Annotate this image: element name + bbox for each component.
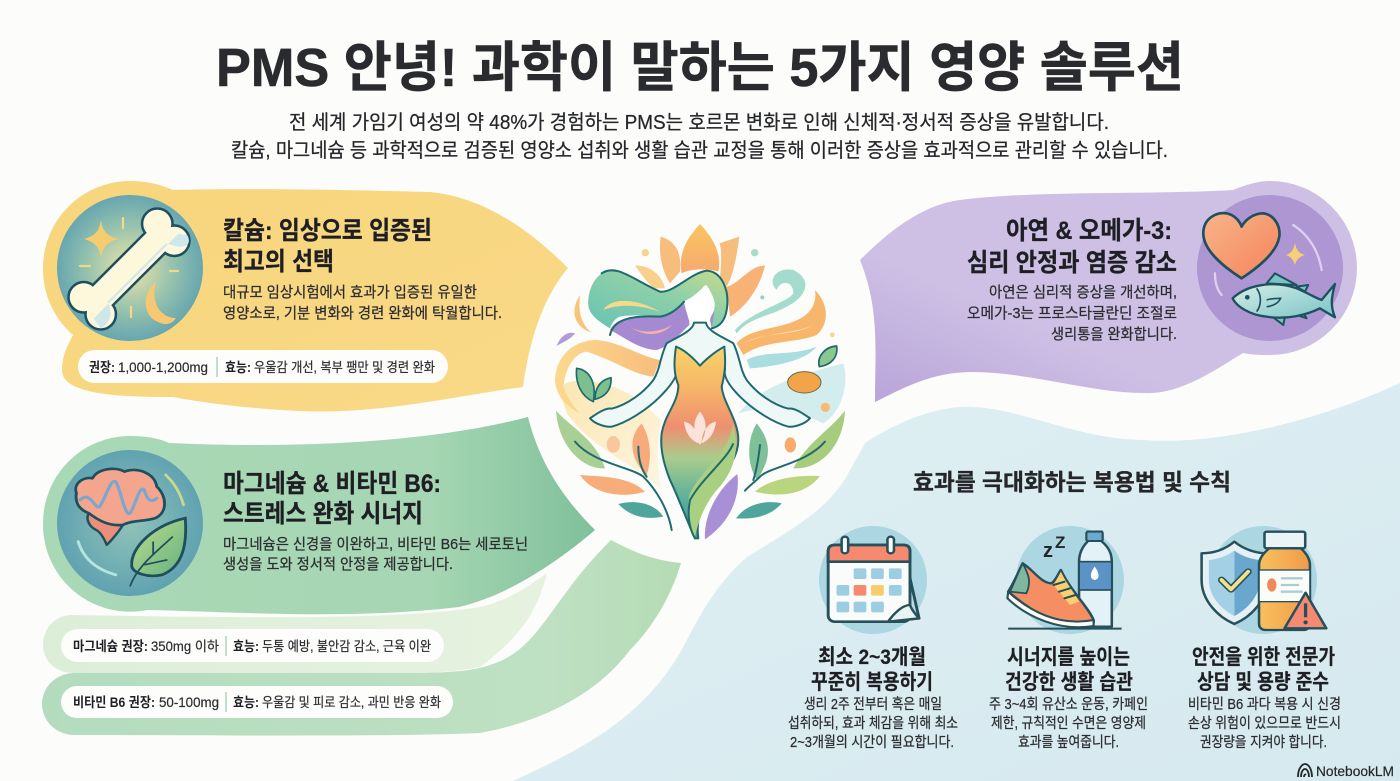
magnesium dosage pill: 마그네슘 권장: (73, 639, 148, 654)
tip text (788, 695, 958, 751)
magnesium dosage pill (61, 629, 444, 662)
botanical leaves (556, 411, 845, 539)
panel: dosing tips background (513, 383, 1400, 781)
heading (223, 470, 441, 528)
tip heading: 건강한 생활 습관 (1005, 671, 1133, 694)
flowing waves (555, 269, 826, 413)
icon: shield, supplement bottle and warning sign (1202, 526, 1326, 634)
tip heading (811, 646, 933, 694)
figure (588, 270, 810, 538)
panel: zinc and omega-3 (860, 181, 1357, 402)
dosage pill: 효능: (225, 360, 251, 375)
vitamin B6 dosage pill (61, 686, 453, 718)
vitamin B6 dosage pill: 비타민 B6 권장: (73, 695, 155, 710)
tip heading (1192, 646, 1335, 694)
tip text: 권장량을 지켜야 합니다. (1200, 734, 1327, 751)
description: 대규모 임상시험에서 효과가 입증된 유일한 (223, 284, 477, 301)
dosage pill (78, 350, 448, 383)
heading (967, 217, 1177, 277)
vitamin B6 band (42, 540, 681, 736)
soft background washes (558, 363, 845, 490)
tip 2: healthy habits (989, 526, 1148, 751)
intro text: 칼슘, 마그네슘 등 과학적으로 검증된 영양소 섭취와 생활 습관 교정을 통해 이러한 증상을 효과적으로 관리할 수 있습니다. (231, 139, 1168, 162)
tip 3: consult and dose safely (1188, 526, 1341, 751)
intro text (231, 111, 1168, 162)
tip heading: 최소 2~3개월 (818, 646, 926, 669)
vitamin B6 dosage pill: 효능: (233, 695, 259, 710)
icon: heart and fish (1197, 195, 1343, 341)
tip text: 손상 위험이 있으므로 반드시 (1188, 715, 1341, 732)
icon: calendar (819, 526, 927, 634)
lotus petals (635, 224, 765, 317)
tip text: 주 3~4회 유산소 운동, 카페인 (989, 696, 1148, 713)
small leaves, supplement capsule and dots (576, 295, 837, 412)
tip heading: 꾸준히 복용하기 (811, 671, 933, 694)
panel: magnesium and vitamin B6 (42, 417, 681, 736)
heading (223, 217, 432, 276)
heading: 최고의 선택 (223, 248, 334, 276)
dosage pill: 권장: (89, 360, 115, 375)
illustration: central woman with lotus and leaves (555, 224, 845, 539)
description: 생리통을 완화합니다. (1051, 326, 1177, 343)
magnesium dosage pill: 두통 예방, 불안감 감소, 근육 이완 (262, 639, 431, 654)
magnesium dosage pill: 효능: (233, 639, 259, 654)
tip text: 생리 2주 전부터 혹은 매일 (804, 695, 942, 713)
icon: brain and leaf (57, 450, 203, 596)
description (223, 284, 502, 322)
dosage pill: 우울감 개선, 복부 팽만 및 경련 완화 (254, 360, 435, 375)
heading: 심리 안정과 염증 감소 (967, 249, 1177, 277)
icon: running shoe and water bottle (1007, 526, 1124, 634)
description: 영양소로, 기분 변화와 경련 완화에 탁월합니다. (223, 305, 502, 322)
dosage pill: 1,000-1,200mg (118, 360, 208, 375)
tip heading: 상담 및 용량 준수 (1197, 671, 1329, 694)
icon: bone with moon and star (57, 195, 203, 341)
heading: 아연 & 오메가-3: (1006, 217, 1172, 245)
main green shape (43, 417, 595, 614)
tip text: 비타민 B6 과다 복용 시 신경 (1188, 696, 1341, 713)
tip heading: 안전을 위한 전문가 (1192, 646, 1335, 669)
tip 1: take for 2-3 months (788, 526, 958, 751)
heading: 스트레스 완화 시너지 (223, 500, 423, 528)
vitamin B6 dosage pill: 50-100mg (159, 695, 219, 710)
section heading: dosing rules: 효과를 극대화하는 복용법 및 수칙 (913, 469, 1231, 495)
magnesium dosage pill: 350mg 이하 (151, 639, 220, 654)
intro text: 전 세계 가임기 여성의 약 48%가 경험하는 PMS는 호르몬 변화로 인해 신체적·정서적 증상을 유발합니다. (289, 111, 1109, 134)
tip text: 2~3개월의 시간이 필요합니다. (790, 734, 954, 751)
tip heading (1005, 646, 1133, 694)
icon: running shoe and water bottle: z (1043, 540, 1053, 562)
heading: 마그네슘 & 비타민 B6: (223, 470, 441, 498)
tip text: 효과를 높여줍니다. (1018, 734, 1119, 751)
description (967, 284, 1177, 343)
description: 아연은 심리적 증상을 개선하며, (989, 284, 1177, 301)
description: 생성을 도와 정서적 안정을 제공합니다. (223, 556, 453, 573)
tip text (1188, 696, 1341, 751)
tip text: 섭취하되, 효과 체감을 위해 최소 (788, 715, 958, 732)
icon: running shoe and water bottle: Z (1055, 533, 1065, 552)
tip heading: 시너지를 높이는 (1007, 646, 1130, 669)
description: 마그네슘은 신경을 이완하고, 비타민 B6는 세로토닌 (223, 536, 528, 553)
panel: calcium (43, 181, 568, 412)
tip text: 제한, 규칙적인 수면은 영양제 (991, 715, 1146, 732)
title: PMS 안녕! 과학이 말하는 5가지 영양 솔루션 (216, 38, 1184, 98)
description: 오메가-3는 프로스타글란딘 조절로 (967, 305, 1177, 322)
logo: NotebookLM: NotebookLM (1316, 763, 1394, 779)
magnesium band (43, 573, 547, 673)
description (223, 536, 528, 573)
vitamin B6 dosage pill: 우울감 및 피로 감소, 과민 반응 완화 (262, 695, 441, 710)
heading: 칼슘: 임상으로 입증된 (223, 217, 432, 245)
tip text (989, 696, 1148, 751)
